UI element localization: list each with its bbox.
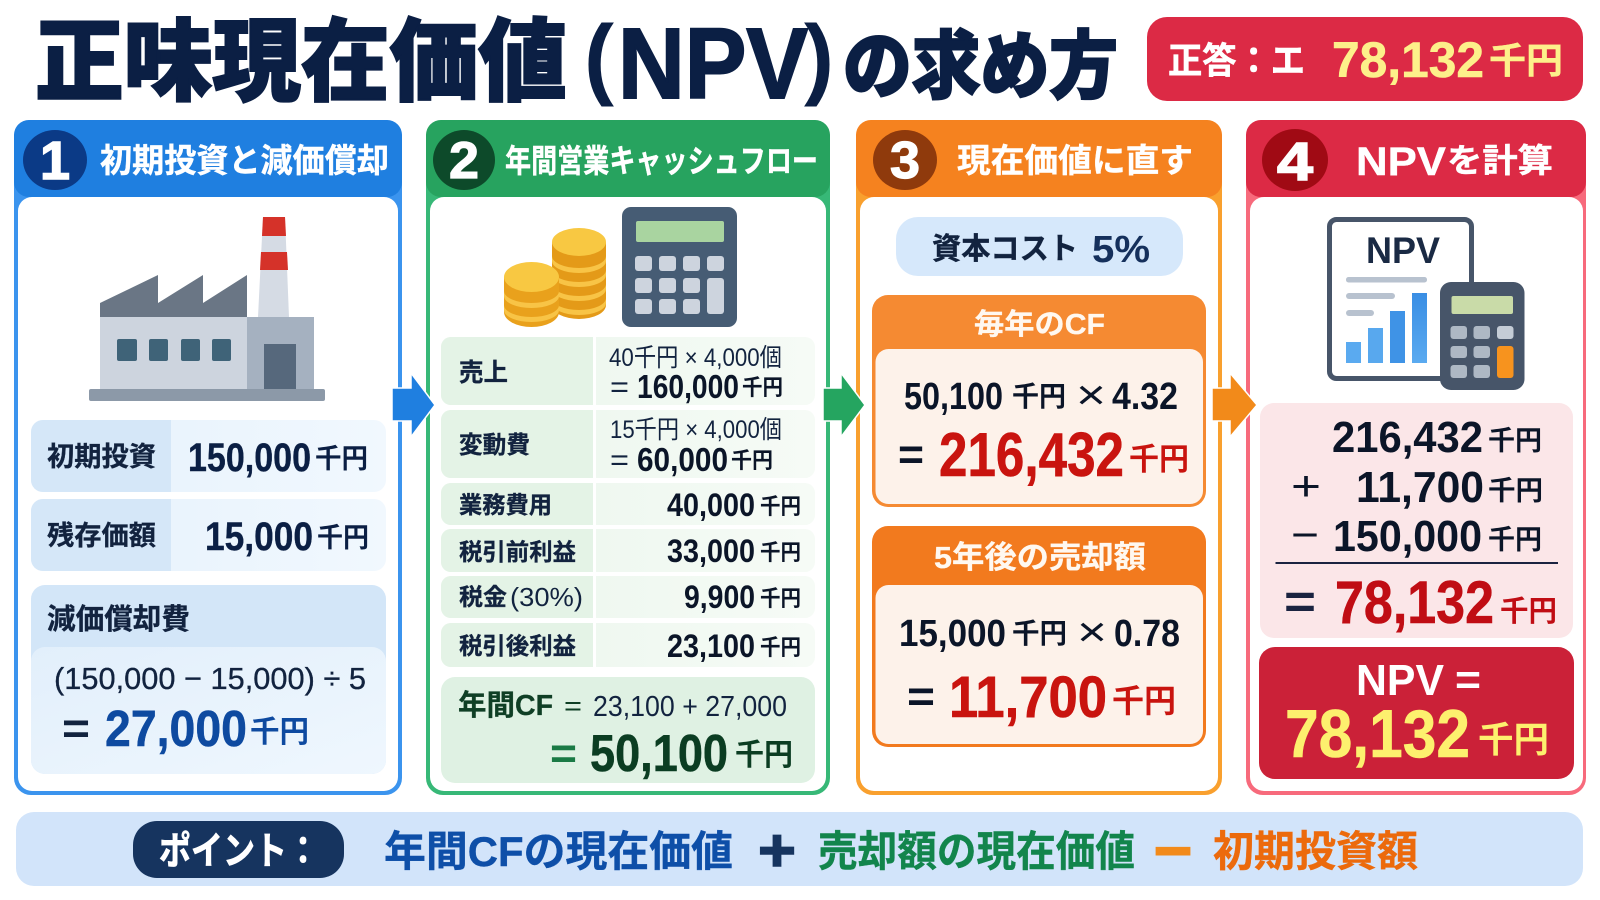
sale value box: 千円: [1112, 683, 1176, 719]
depreciation box: 千円: [250, 716, 309, 749]
annual CF box: ×: [1076, 371, 1106, 418]
NPV calculation box: 千円: [1488, 426, 1542, 456]
table row: sales: 160,000: [637, 368, 739, 405]
capital cost pill: 5%: [1092, 229, 1150, 271]
panel 3 header: 現在価値に直す: [957, 142, 1193, 179]
panel 2 header: 年間営業キャッシュフロー: [505, 143, 818, 179]
row: residual value: 15,000: [205, 515, 313, 559]
panel 3 header: 3: [890, 132, 920, 190]
annual CF box: 毎年のCF: [974, 308, 1105, 341]
panel 2 header: 2: [449, 132, 479, 190]
NPV calculation box: 78,132: [1335, 569, 1494, 636]
table row: variable cost: =: [610, 444, 629, 477]
annual CF box: 50,100: [904, 376, 1003, 418]
icon: NPV document with chart: NPV: [1366, 230, 1440, 271]
table row: after-tax profit: 税引後利益: [459, 633, 576, 659]
row: initial investment: 150,000: [188, 436, 311, 480]
formula: annual CF present value: 年間CFの現在価値: [384, 828, 733, 875]
formula: initial investment: 初期投資額: [1213, 828, 1418, 875]
NPV calculation box: =: [1284, 576, 1316, 629]
capital cost pill: [896, 217, 1183, 276]
annual CF box: 千円: [1012, 381, 1066, 412]
capital cost pill: 資本コスト: [932, 233, 1078, 266]
panel 4 header: を計算: [1447, 142, 1553, 179]
NPV result box: 千円: [1478, 719, 1549, 760]
depreciation box: 27,000: [105, 700, 247, 757]
panel 1 header: [14, 120, 402, 197]
NPV calculation box: 216,432: [1332, 413, 1483, 462]
NPV result box: 78,132: [1285, 696, 1470, 772]
row: residual value: 千円: [317, 523, 369, 553]
table row: operating expense: 業務費用: [459, 492, 552, 518]
panel 4 header: 4: [1277, 132, 1313, 192]
row: initial investment: 初期投資: [47, 442, 156, 472]
arrow: step 3 to 4: [1212, 373, 1257, 437]
depreciation box: 減価償却費: [47, 603, 190, 636]
table row: after-tax profit: 23,100: [667, 628, 755, 664]
NPV calculation box: 150,000: [1333, 512, 1482, 561]
title: 正味現在価値: [35, 13, 567, 113]
NPV result box: NPV: [1356, 656, 1445, 705]
sale value box: 5年後の売却額: [934, 540, 1146, 575]
table row: variable cost: 変動費: [459, 432, 530, 459]
table row: tax: (30%): [510, 582, 583, 612]
table row: tax: 税金: [459, 584, 508, 610]
answer badge: 78,132: [1332, 32, 1484, 88]
table row: after-tax profit: [441, 623, 815, 667]
annual CF box: 千円: [1129, 442, 1189, 477]
answer badge: [1147, 17, 1583, 101]
panel 4: calculate NPV: [1246, 120, 1586, 795]
sale value box: 千円: [1012, 618, 1067, 649]
table row: operating expense: [441, 483, 815, 525]
table row: tax: 9,900: [684, 579, 755, 615]
formula: sale value present value: 売却額の現在価値: [818, 828, 1135, 875]
point label pill: ポイント：: [159, 831, 319, 873]
sale value box: 15,000: [899, 613, 1006, 655]
title: の求め方: [843, 25, 1118, 108]
table row: variable cost: [441, 410, 815, 478]
annual CF box: 4.32: [1112, 376, 1178, 418]
title: [35, 8, 1118, 120]
title: ): [804, 8, 834, 108]
annual CF box: =: [898, 430, 924, 479]
annual cash flow total: 50,100: [590, 725, 728, 783]
NPV calculation box: 千円: [1488, 525, 1542, 555]
table row: sales: [441, 337, 815, 405]
sale value box: =: [907, 672, 935, 721]
NPV result box: [1259, 647, 1574, 779]
row: residual value: [31, 499, 386, 571]
annual CF box: 216,432: [939, 421, 1124, 490]
table row: operating expense: 40,000: [667, 487, 755, 523]
sale value box: [872, 526, 1206, 747]
row: residual value: 残存価額: [47, 521, 156, 551]
panel 4 header: [1246, 120, 1586, 197]
answer badge: 正答：エ: [1168, 40, 1305, 81]
depreciation box: =: [62, 704, 90, 753]
panel 3 header: [856, 120, 1222, 197]
panel 4 header: NPV: [1356, 140, 1446, 184]
table row: operating expense: 千円: [760, 494, 801, 519]
panel 3: convert to present value: [856, 120, 1222, 795]
table row: sales: 売上: [459, 359, 508, 387]
table row: sales: =: [610, 371, 629, 404]
table row: pre-tax profit: 千円: [760, 540, 801, 565]
operator minus: −: [1154, 817, 1192, 884]
annual cash flow total: =: [564, 691, 582, 721]
panel 1 header: 1: [40, 131, 70, 191]
table row: tax: 千円: [760, 586, 801, 611]
annual CF box: [872, 295, 1206, 507]
row: initial investment: [31, 420, 386, 492]
table row: after-tax profit: 千円: [760, 635, 801, 660]
answer badge: 千円: [1489, 40, 1563, 81]
icon: factory: [89, 217, 325, 401]
table row: variable cost: 60,000: [637, 441, 728, 478]
point label pill: [133, 821, 344, 878]
table row: sales: 千円: [742, 375, 783, 400]
table row: pre-tax profit: 税引前利益: [459, 539, 576, 565]
depreciation box: (150,000 − 15,000) ÷ 5: [54, 661, 366, 696]
annual cash flow total: 年間CF: [458, 689, 553, 722]
annual cash flow total: 23,100 + 27,000: [593, 691, 787, 723]
arrow: step 1 to 2: [392, 373, 435, 437]
panel 2 header: [426, 120, 830, 197]
table row: variable cost: 千円: [731, 448, 773, 473]
NPV result box: =: [1455, 656, 1481, 703]
table row: tax: [441, 576, 815, 618]
arrow: step 2 to 3: [823, 373, 865, 437]
icon: NPV document with chart: [1330, 220, 1472, 378]
panel 2: annual operating cash flow: [426, 120, 830, 795]
table row: variable cost: 15千円 × 4,000個: [610, 416, 782, 444]
NPV calculation box: −: [1291, 511, 1319, 558]
bottom point bar: [16, 812, 1583, 886]
annual cash flow total: 千円: [735, 739, 793, 772]
row: initial investment: 千円: [315, 444, 368, 474]
NPV calculation box: +: [1291, 462, 1321, 509]
NPV calculation box: 11,700: [1356, 463, 1484, 512]
depreciation box: [31, 585, 386, 774]
table row: sales: 40千円 × 4,000個: [609, 344, 782, 372]
NPV calculation box: [1260, 403, 1573, 638]
icon: coins: [504, 228, 606, 327]
sale value box: 0.78: [1114, 613, 1180, 655]
NPV calculation box: 千円: [1500, 595, 1557, 628]
operator plus: +: [758, 817, 796, 884]
annual cash flow total: [441, 677, 815, 783]
panel 1: initial investment and depreciation: [14, 120, 402, 795]
table row: pre-tax profit: 33,000: [667, 533, 755, 569]
panel 1 header: 初期投資と減価償却: [100, 142, 389, 179]
table row: pre-tax profit: [441, 529, 815, 572]
icon: calculator small: [1440, 282, 1524, 390]
annual cash flow total: =: [550, 729, 577, 778]
sale value box: 11,700: [949, 665, 1107, 730]
title: (: [584, 8, 614, 108]
icon: calculator: [622, 207, 737, 327]
sale value box: ×: [1077, 608, 1107, 655]
title: NPV: [618, 8, 808, 120]
NPV calculation box: 千円: [1488, 476, 1543, 506]
